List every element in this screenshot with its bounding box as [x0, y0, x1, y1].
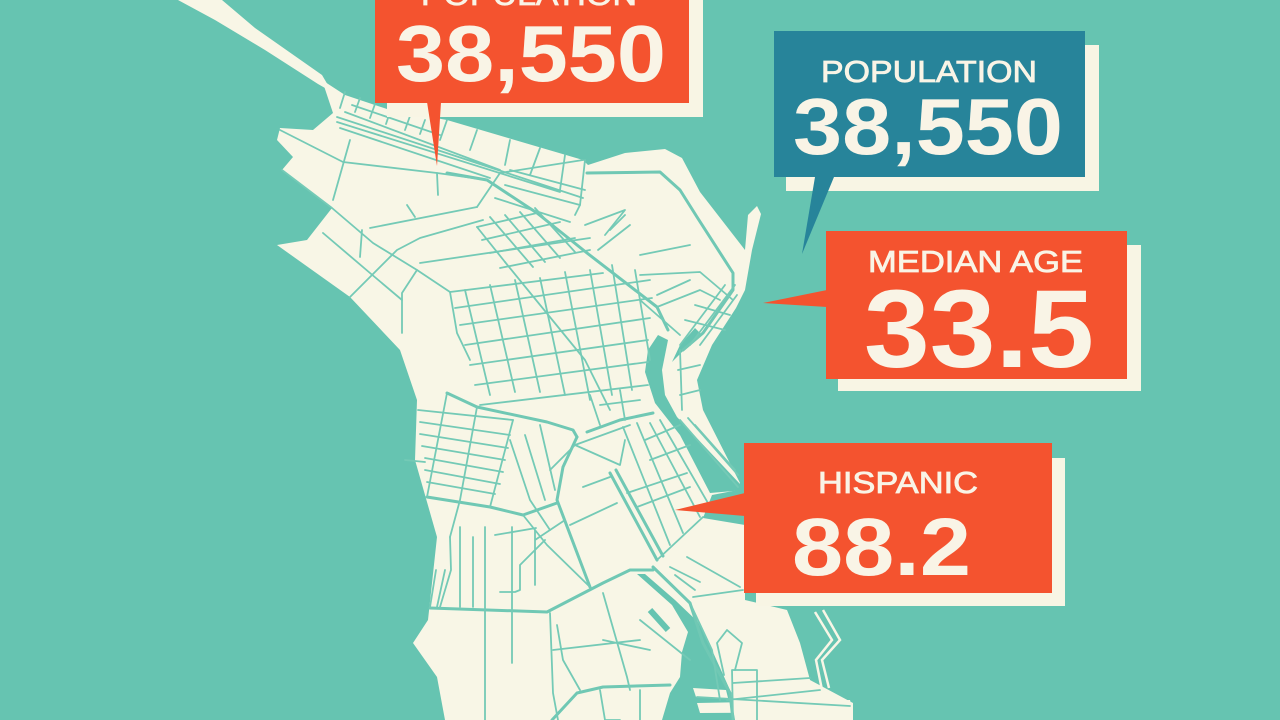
callout box: [744, 443, 1052, 593]
callout: population teal: [774, 31, 1099, 254]
callout pointer: [675, 493, 745, 516]
callout pointer: [802, 177, 834, 254]
callout: median age: [763, 231, 1141, 391]
callout shadow: [838, 245, 1141, 391]
river channel: [645, 328, 745, 493]
pier: [178, 0, 332, 92]
callout shadow: [387, 0, 703, 117]
secondary roads: [280, 92, 850, 720]
callout box: [774, 31, 1085, 177]
value: 38,550: [793, 82, 1063, 171]
label: MEDIAN AGE: [868, 244, 1083, 279]
inlet: [650, 610, 668, 630]
east strip: [815, 610, 840, 690]
map: [178, 0, 853, 720]
callout box: [375, 0, 689, 103]
south channel: [637, 574, 735, 720]
callout shadow: [786, 45, 1099, 191]
value: 88.2: [792, 502, 971, 593]
callout pointer: [427, 102, 441, 166]
value: 38,550: [396, 9, 666, 98]
label: POPULATION: [821, 54, 1037, 89]
label: HISPANIC: [818, 465, 978, 500]
value: 33.5: [864, 268, 1094, 391]
callout pointer: [763, 290, 827, 307]
land: [277, 80, 853, 720]
south channel east bank: [693, 688, 853, 713]
callout shadow: [756, 458, 1065, 606]
callout box: [826, 231, 1127, 379]
main roads: [427, 172, 733, 720]
callout: hispanic: [675, 443, 1065, 606]
callout: population red: [375, 0, 703, 166]
